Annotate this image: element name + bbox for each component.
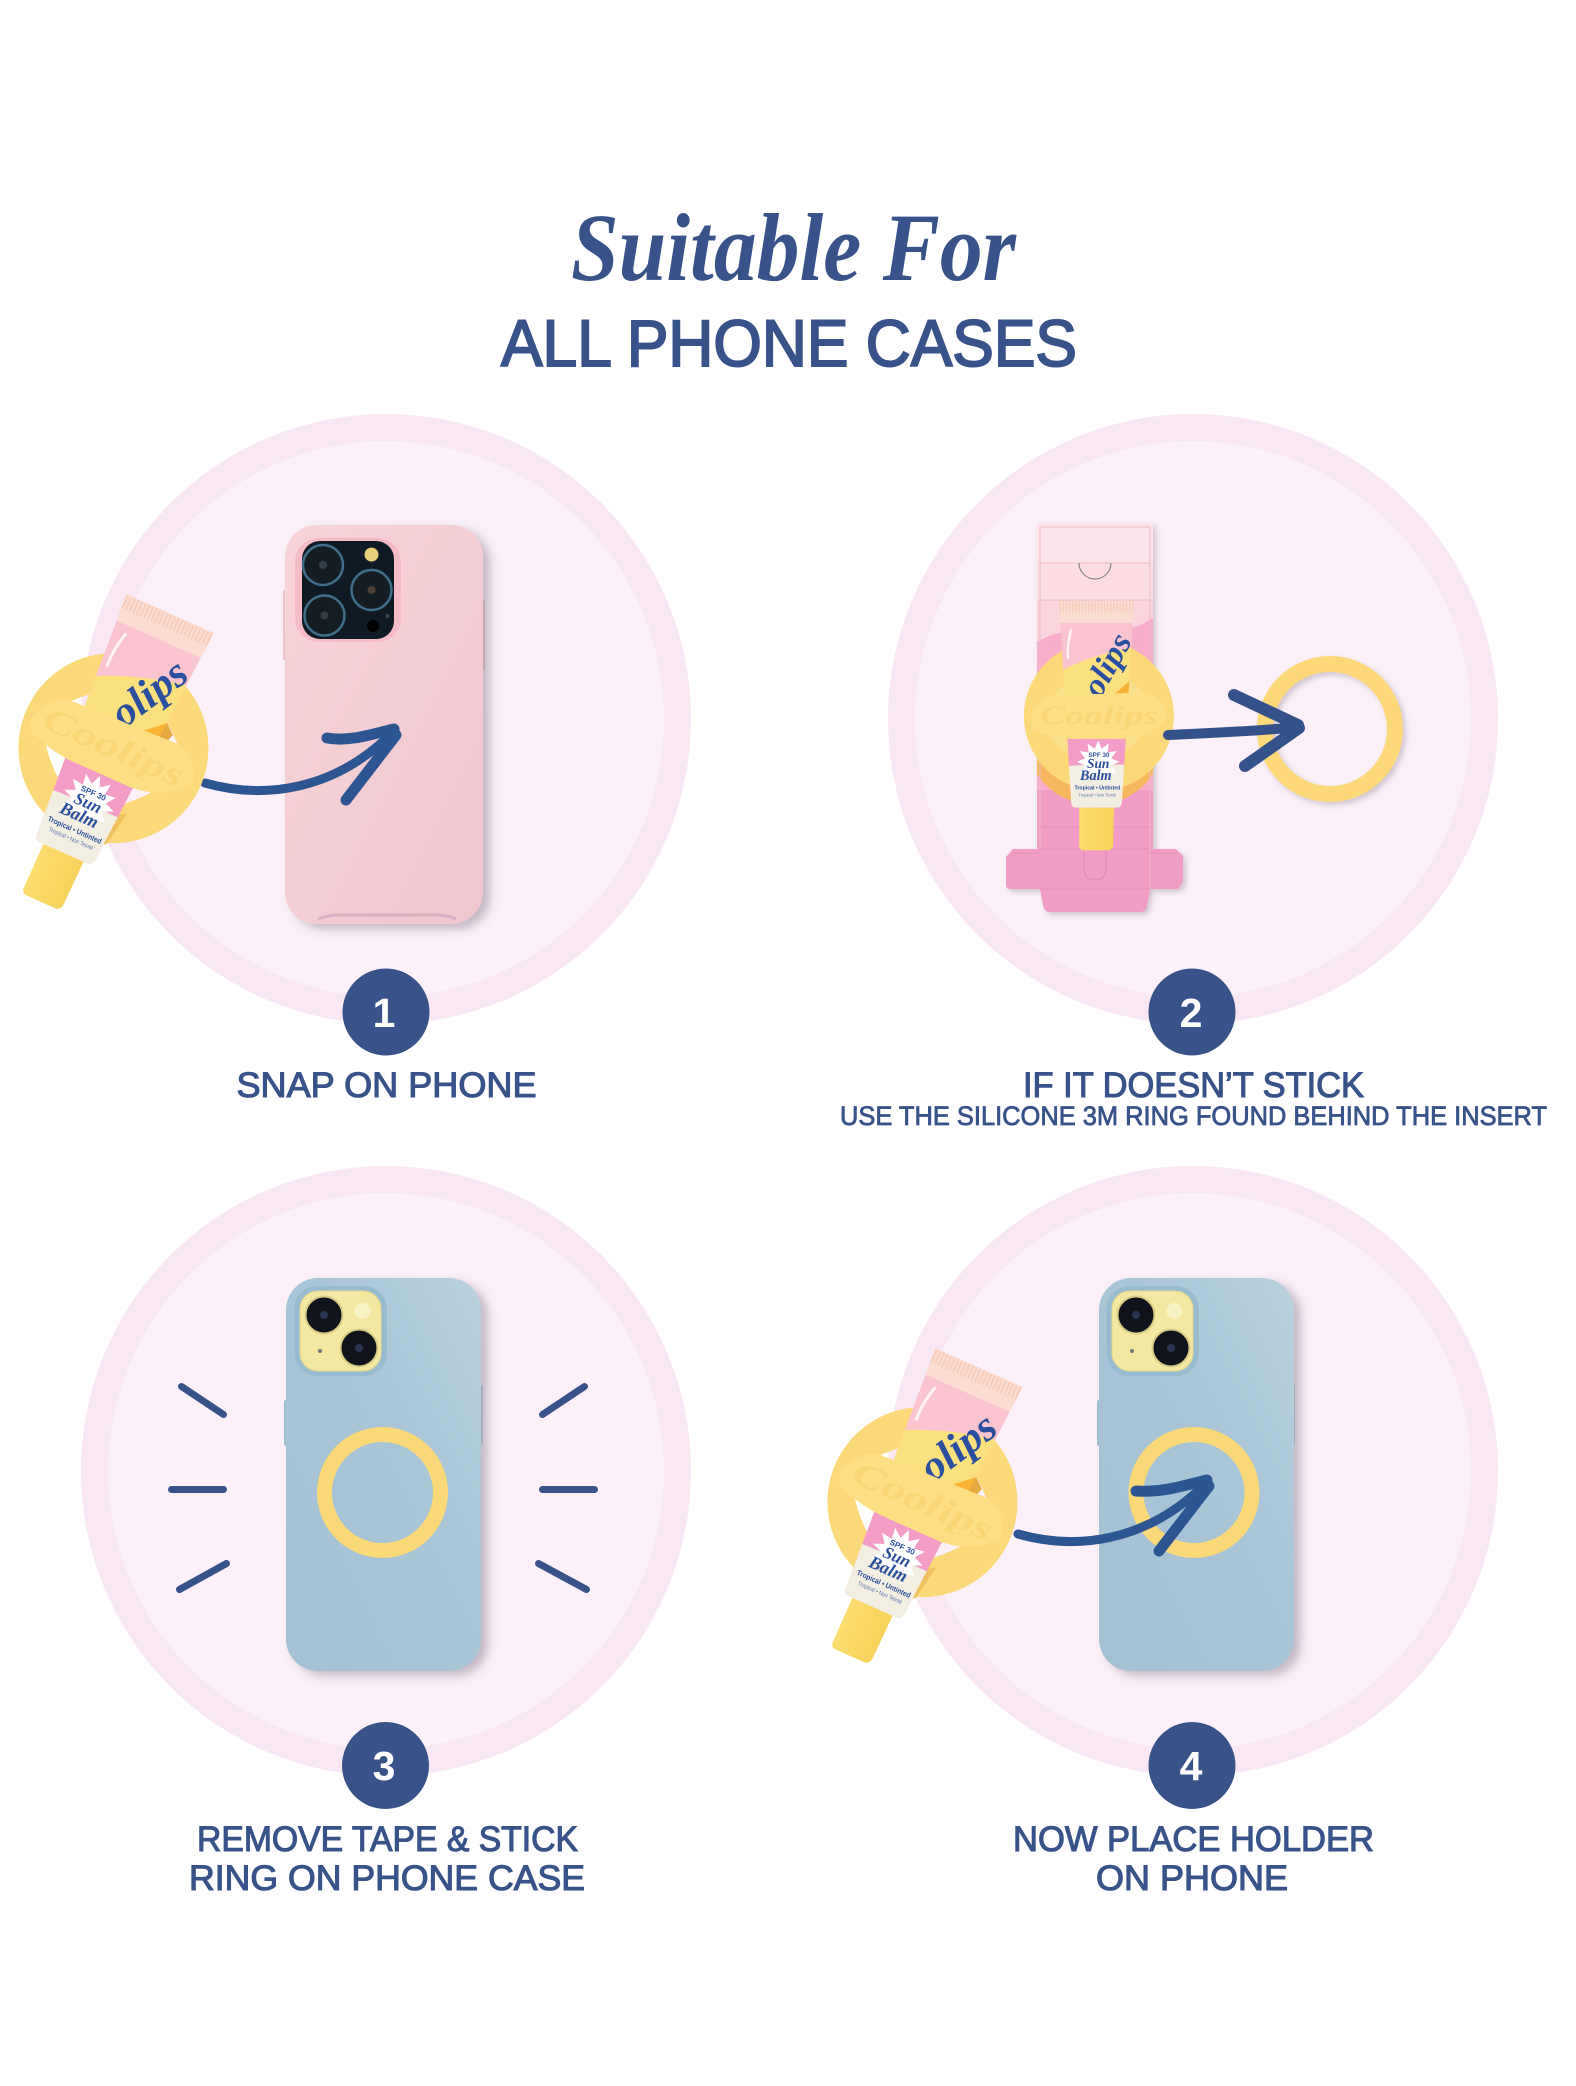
holder band xyxy=(22,685,205,810)
tube label: Balm xyxy=(865,1551,911,1586)
icon: sun balm tube in holder xyxy=(827,1348,1023,1663)
step sublabel: USE THE SILICONE 3M RING FOUND BEHIND THE INSERT xyxy=(840,1101,1547,1131)
background circle xyxy=(888,1166,1498,1776)
step label: SNAP ON PHONE xyxy=(236,1066,536,1105)
number badge 3: 3 xyxy=(373,1743,395,1789)
tube brand: Coolips xyxy=(61,650,197,768)
tube label: Balm xyxy=(56,797,102,832)
arrow xyxy=(1018,1480,1209,1551)
title xyxy=(501,194,1077,380)
icon: yellow silicone ring xyxy=(1265,664,1395,794)
tube label: Tropical • Untinted xyxy=(46,814,103,846)
step label xyxy=(1013,1820,1374,1898)
tube label: Tropical • Untinted xyxy=(1074,785,1121,791)
number badge 4: 4 xyxy=(1180,1743,1203,1789)
step label: NOW PLACE HOLDER xyxy=(1013,1820,1374,1859)
number badge 1 xyxy=(342,968,430,1056)
tube label: SPF 30 xyxy=(1088,752,1110,759)
icon: ring on case xyxy=(324,1434,440,1550)
panel: step 1 snap on phone xyxy=(0,414,691,1105)
step label: REMOVE TAPE & STICK xyxy=(197,1820,578,1859)
step label xyxy=(189,1820,585,1898)
tube label: Tropical • Non Teinté xyxy=(856,1581,903,1606)
tube label: Sun xyxy=(880,1542,914,1571)
emphasis rays xyxy=(172,1386,594,1590)
number badge 1: 1 xyxy=(373,990,395,1036)
holder band: Coolips xyxy=(38,700,190,795)
icon: sun balm tube in holder xyxy=(1024,601,1174,850)
holder band xyxy=(1030,692,1168,739)
holder band xyxy=(831,1439,1014,1564)
arrow xyxy=(205,729,396,800)
tube label: Tropical • Non Teinté xyxy=(1078,793,1117,799)
background circle xyxy=(81,1166,691,1776)
tube label: Tropical • Non Teinté xyxy=(47,827,94,852)
tube label xyxy=(43,777,120,854)
number badge 2: 2 xyxy=(1180,990,1202,1036)
pink phone xyxy=(283,525,485,924)
holder band: Coolips xyxy=(847,1454,999,1549)
tube label: Sun xyxy=(71,788,105,817)
step label: RING ON PHONE CASE xyxy=(189,1859,585,1898)
panel: step 3 stick ring xyxy=(81,1166,691,1898)
number badge 4 xyxy=(1148,1722,1236,1809)
blue phone xyxy=(284,1278,483,1671)
tube label xyxy=(852,1531,929,1608)
icon: ring on case xyxy=(1136,1434,1252,1550)
background circle xyxy=(81,414,691,1024)
number badge 2 xyxy=(1148,968,1236,1056)
main heading: ALL PHONE CASES xyxy=(501,306,1077,380)
tube brand: Coolips xyxy=(1055,627,1139,738)
panel: step 4 place holder xyxy=(767,1166,1498,1898)
tube label: SPF 30 xyxy=(888,1538,917,1557)
arrow xyxy=(1168,695,1299,766)
icon: sun balm tube in holder xyxy=(18,594,214,909)
tube label: Tropical • Untinted xyxy=(855,1568,912,1600)
background circle xyxy=(888,414,1498,1024)
step label: IF IT DOESN’T STICK xyxy=(1023,1066,1364,1105)
tube label: Sun xyxy=(1087,756,1109,771)
script heading: Suitable For xyxy=(571,194,1017,301)
number badge 3 xyxy=(342,1722,429,1809)
tube label: Balm xyxy=(1079,768,1112,784)
holder band: Coolips xyxy=(1040,700,1158,730)
blue phone xyxy=(1097,1278,1295,1671)
tube label: SPF 30 xyxy=(79,784,108,803)
tube label xyxy=(1074,752,1121,799)
step label: ON PHONE xyxy=(1096,1859,1288,1898)
panel: step 2 silicone ring xyxy=(840,414,1547,1131)
packaging insert card xyxy=(1006,523,1183,912)
tube brand: Coolips xyxy=(870,1404,1006,1522)
